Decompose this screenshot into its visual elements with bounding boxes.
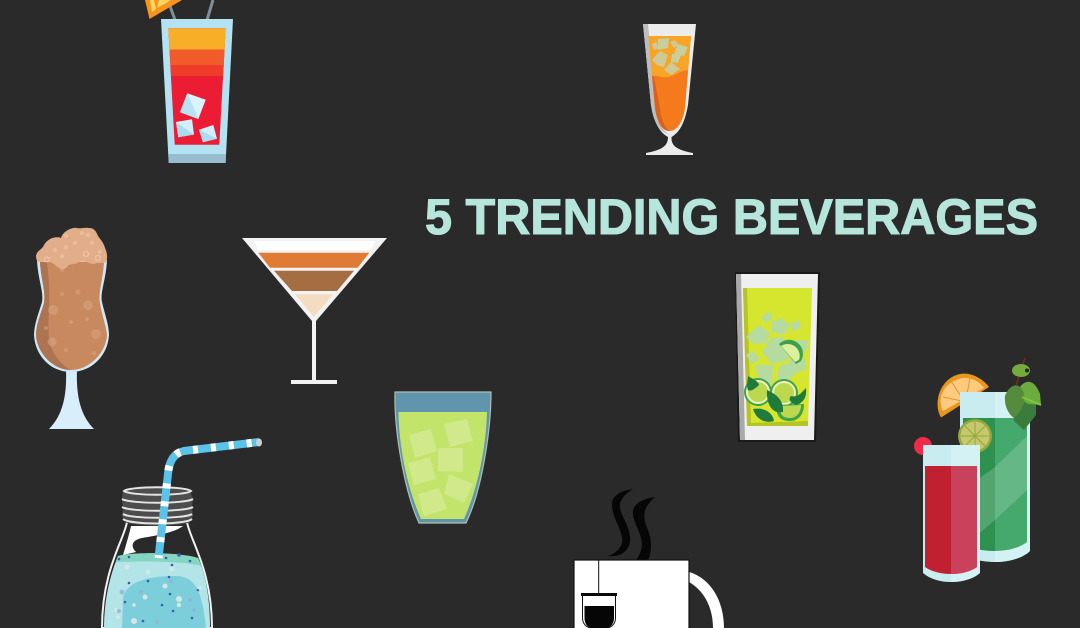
icon: red layered cocktail [145,0,233,163]
bubbles [44,268,101,355]
mug body [574,560,689,628]
icon: lime drink tumbler [395,392,491,523]
icon: mason jar with striped straw [102,438,262,628]
cherry [914,437,932,455]
striped straw [158,442,259,558]
mint leaves [747,376,806,422]
neck highlight [123,526,183,555]
icon: orange iced drink in tall stemmed glass [643,24,696,155]
icon: mojito highball [735,272,820,442]
tea bag [581,560,617,628]
icon: white mug with tea bag and steam [574,489,724,628]
tall green glass [960,392,1030,562]
foam [36,228,107,269]
seeds [118,553,199,622]
lime slices [744,340,804,421]
jar outline [102,522,212,628]
jar lid threads [122,486,193,526]
icon: two tall drinks with garnish [914,358,1041,582]
short red glass [923,445,980,582]
ice cubes [746,313,808,407]
mint leaves [1013,399,1036,430]
title: 5 TRENDING BEVERAGES [425,189,1038,245]
steam [608,489,633,556]
ice cubes [652,38,688,75]
liquid [104,553,210,628]
handle [689,572,724,628]
orange slice [938,374,989,418]
ice cubes [408,419,473,516]
lime slice [958,419,992,453]
icon: layered martini [242,238,387,384]
olive pick [1016,358,1025,385]
icon: chocolate frappe glass [34,228,109,429]
